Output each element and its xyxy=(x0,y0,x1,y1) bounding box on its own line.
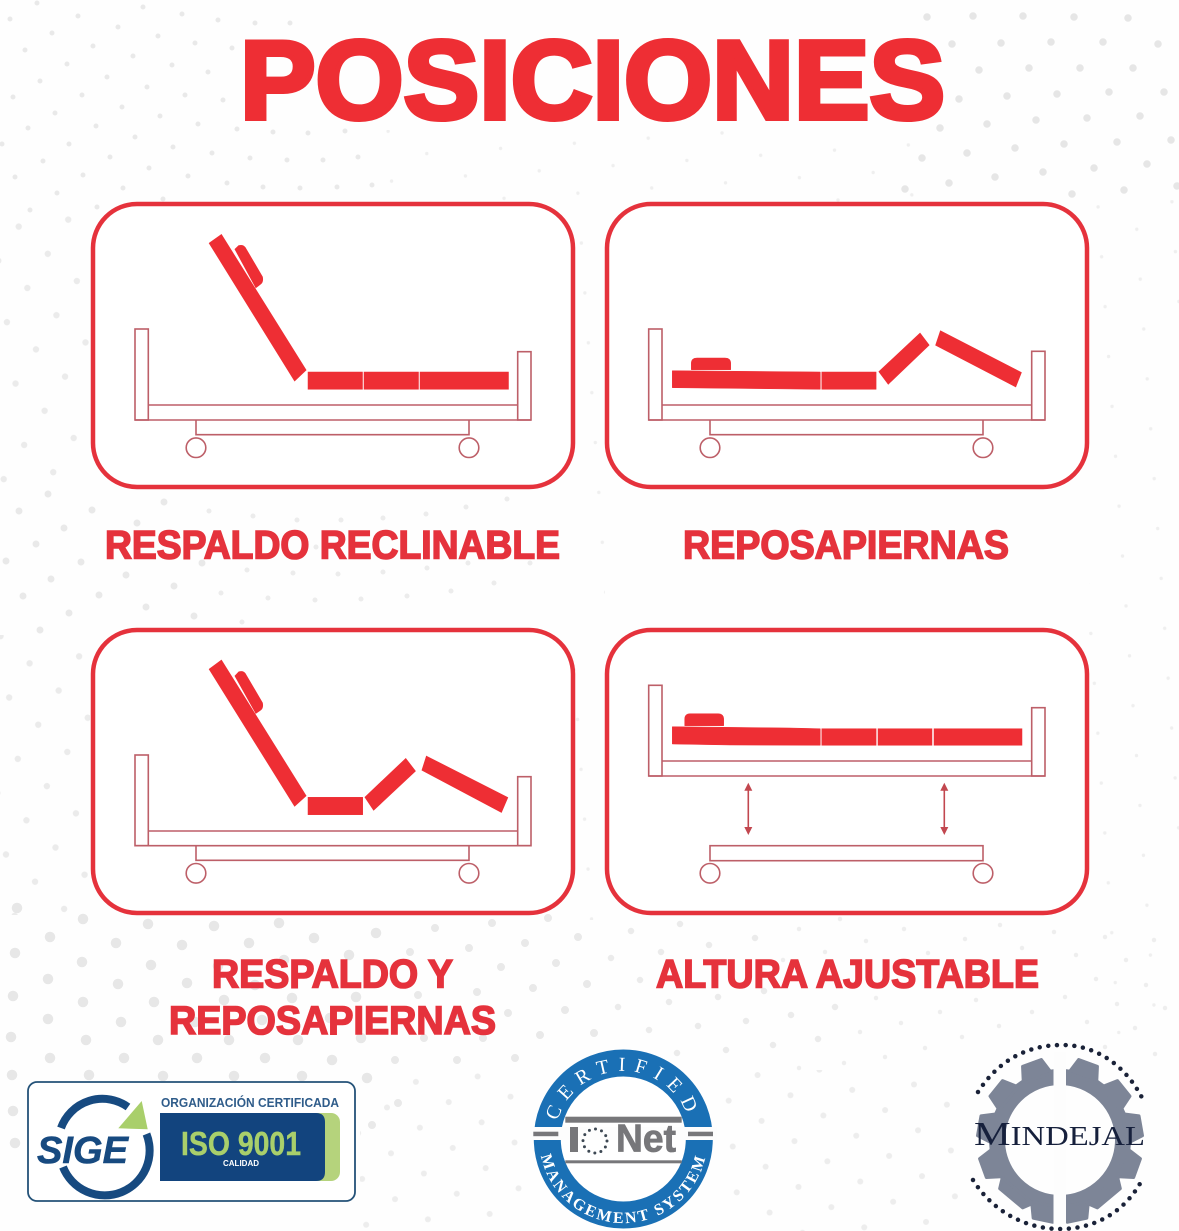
bed frame raised xyxy=(649,685,1045,776)
white band across ring xyxy=(530,1127,717,1140)
gear xyxy=(977,1058,1143,1223)
label: reposapiernas: REPOSAPIERNAS xyxy=(683,524,1009,568)
label: respaldo reclinable: RESPALDO RECLINABLE xyxy=(105,524,560,568)
bed frame xyxy=(135,329,531,458)
iso badge: ISO 9001 xyxy=(181,1125,301,1162)
panel: respaldo reclinable xyxy=(93,204,573,487)
panel: altura ajustable xyxy=(607,630,1087,913)
logo: Mindejal gear xyxy=(973,1045,1145,1229)
mattress xyxy=(210,661,507,815)
mattress xyxy=(210,235,509,389)
certified organisation text: ORGANIZACIÓN CERTIFICADA xyxy=(161,1095,339,1110)
logo: IQNet xyxy=(533,1050,713,1228)
bed frame xyxy=(135,755,531,883)
iqnet wordmark xyxy=(570,1118,676,1160)
arrow: right height xyxy=(940,783,948,835)
sige wordmark: SIGE xyxy=(37,1130,130,1172)
logo: SIGE ISO 9001 xyxy=(28,1082,355,1201)
dotted ring xyxy=(978,1045,1145,1104)
label: respaldo y reposapiernas xyxy=(169,952,496,1043)
title: POSICIONES xyxy=(240,18,945,142)
mindejal wordmark: MINDEJAL xyxy=(974,1116,1145,1153)
arrow: left height xyxy=(744,783,752,835)
label: respaldo y reposapiernas: RESPALDO Y xyxy=(212,952,453,996)
sige ring xyxy=(61,1099,128,1128)
management system arc text: MANAGEMENT SYSTEM xyxy=(540,1153,706,1224)
base with wheels xyxy=(700,846,993,883)
label: altura ajustable: ALTURA AJUSTABLE xyxy=(656,952,1039,996)
iso badge: CALIDAD xyxy=(223,1159,259,1168)
mattress xyxy=(672,332,1021,389)
mattress xyxy=(672,714,1022,745)
iqnet wordmark: Net xyxy=(616,1118,676,1160)
panel: respaldo y reposapiernas xyxy=(93,630,573,913)
certified arc text: CERTIFIED xyxy=(546,1058,696,1118)
panel: reposapiernas xyxy=(607,204,1087,487)
label: respaldo y reposapiernas: REPOSAPIERNAS xyxy=(169,999,496,1043)
iso badge xyxy=(160,1113,340,1181)
bed frame xyxy=(649,329,1045,458)
